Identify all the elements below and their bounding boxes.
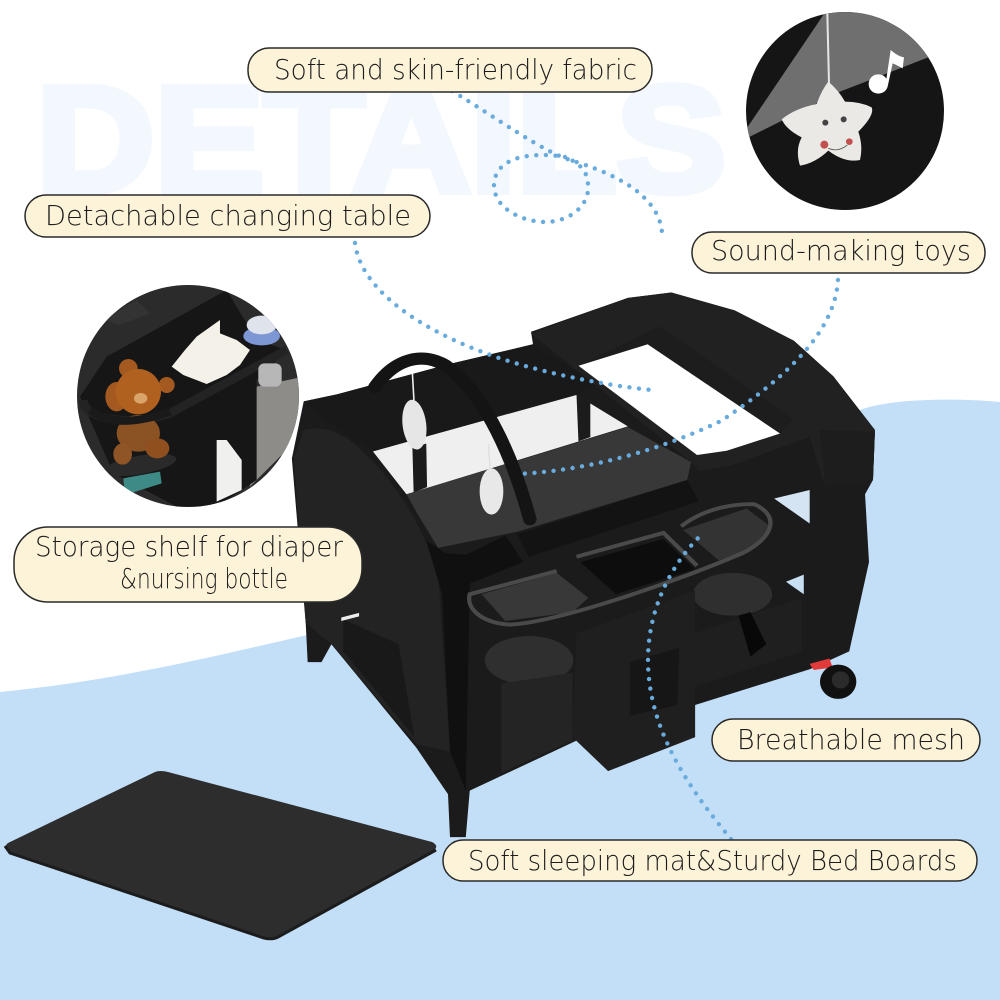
dotted leader: fabric — [452, 91, 662, 240]
grey fabric — [743, 7, 930, 140]
organizer rim — [469, 504, 770, 625]
white strip — [341, 613, 359, 621]
organizer body — [80, 290, 287, 507]
bottle — [243, 316, 282, 387]
lower bag — [501, 673, 573, 773]
label: toys: Sound-making toys — [711, 234, 971, 267]
background: blue wave — [0, 400, 1000, 1000]
pouch inner — [630, 648, 679, 716]
round mesh shelf right — [693, 573, 772, 616]
rim over bear — [90, 410, 170, 421]
right post window — [774, 490, 810, 524]
inset: star toy — [743, 7, 945, 212]
label: storage shelf: Storage shelf for diaper — [35, 530, 343, 563]
wipes — [172, 320, 250, 384]
dotted leader: mat — [648, 533, 731, 839]
changing table body — [531, 292, 875, 488]
toy right — [480, 444, 503, 515]
lower shelf — [104, 454, 176, 476]
window slat right — [576, 394, 590, 441]
star face — [820, 116, 853, 150]
light gaps — [786, 575, 804, 594]
star — [782, 82, 872, 166]
wheel — [820, 665, 856, 699]
table strap — [820, 430, 875, 488]
label: fabric: Soft and skin-friendly fabric — [274, 53, 637, 86]
lower left panel shade — [343, 619, 414, 737]
right lower shelf — [693, 598, 802, 687]
top lighter stripe — [106, 314, 114, 321]
diapers — [217, 440, 242, 502]
top back rail — [304, 344, 596, 451]
basket right mesh — [683, 509, 770, 560]
music note — [869, 50, 904, 94]
label: mesh — [712, 719, 980, 761]
label: storage shelf — [14, 527, 362, 602]
window slat left — [412, 444, 427, 492]
basket middle — [580, 539, 695, 594]
dotted leader: changing table — [355, 243, 652, 390]
label: changing table: Detachable changing table — [45, 199, 411, 232]
brake — [810, 659, 833, 670]
front rail — [517, 480, 699, 557]
corner frame — [426, 535, 523, 791]
back mesh window — [373, 395, 628, 494]
teddy bear — [105, 359, 175, 465]
arch — [375, 359, 530, 519]
sleeping floor — [406, 427, 691, 548]
strap — [739, 612, 766, 657]
toy left — [400, 374, 429, 451]
crib silhouette — [292, 292, 875, 837]
label: mat and boards: Soft sleeping mat&Sturdy Bed Boards — [468, 844, 957, 877]
label: storage shelf: &nursing bottle — [120, 562, 288, 595]
teal pack — [123, 472, 162, 495]
sleeping mat — [5, 771, 436, 939]
dotted leader: toys — [519, 280, 838, 474]
table recess — [578, 326, 794, 434]
crib — [292, 292, 875, 837]
changing table white pad — [578, 344, 780, 455]
basket left mesh — [482, 573, 588, 621]
left end panel — [294, 428, 450, 751]
label: fabric — [248, 48, 652, 92]
string — [827, 13, 829, 83]
center pouch — [573, 591, 695, 771]
rim — [83, 350, 287, 420]
round mesh shelf left — [485, 636, 573, 685]
dotted leader: fabric loop — [494, 155, 588, 222]
watermark: DETAILS: DETAILS — [36, 55, 726, 223]
crib post — [292, 430, 303, 520]
floor — [250, 377, 303, 487]
label: mesh: Breathable mesh — [737, 723, 965, 756]
inset: storage shelf — [77, 285, 299, 507]
